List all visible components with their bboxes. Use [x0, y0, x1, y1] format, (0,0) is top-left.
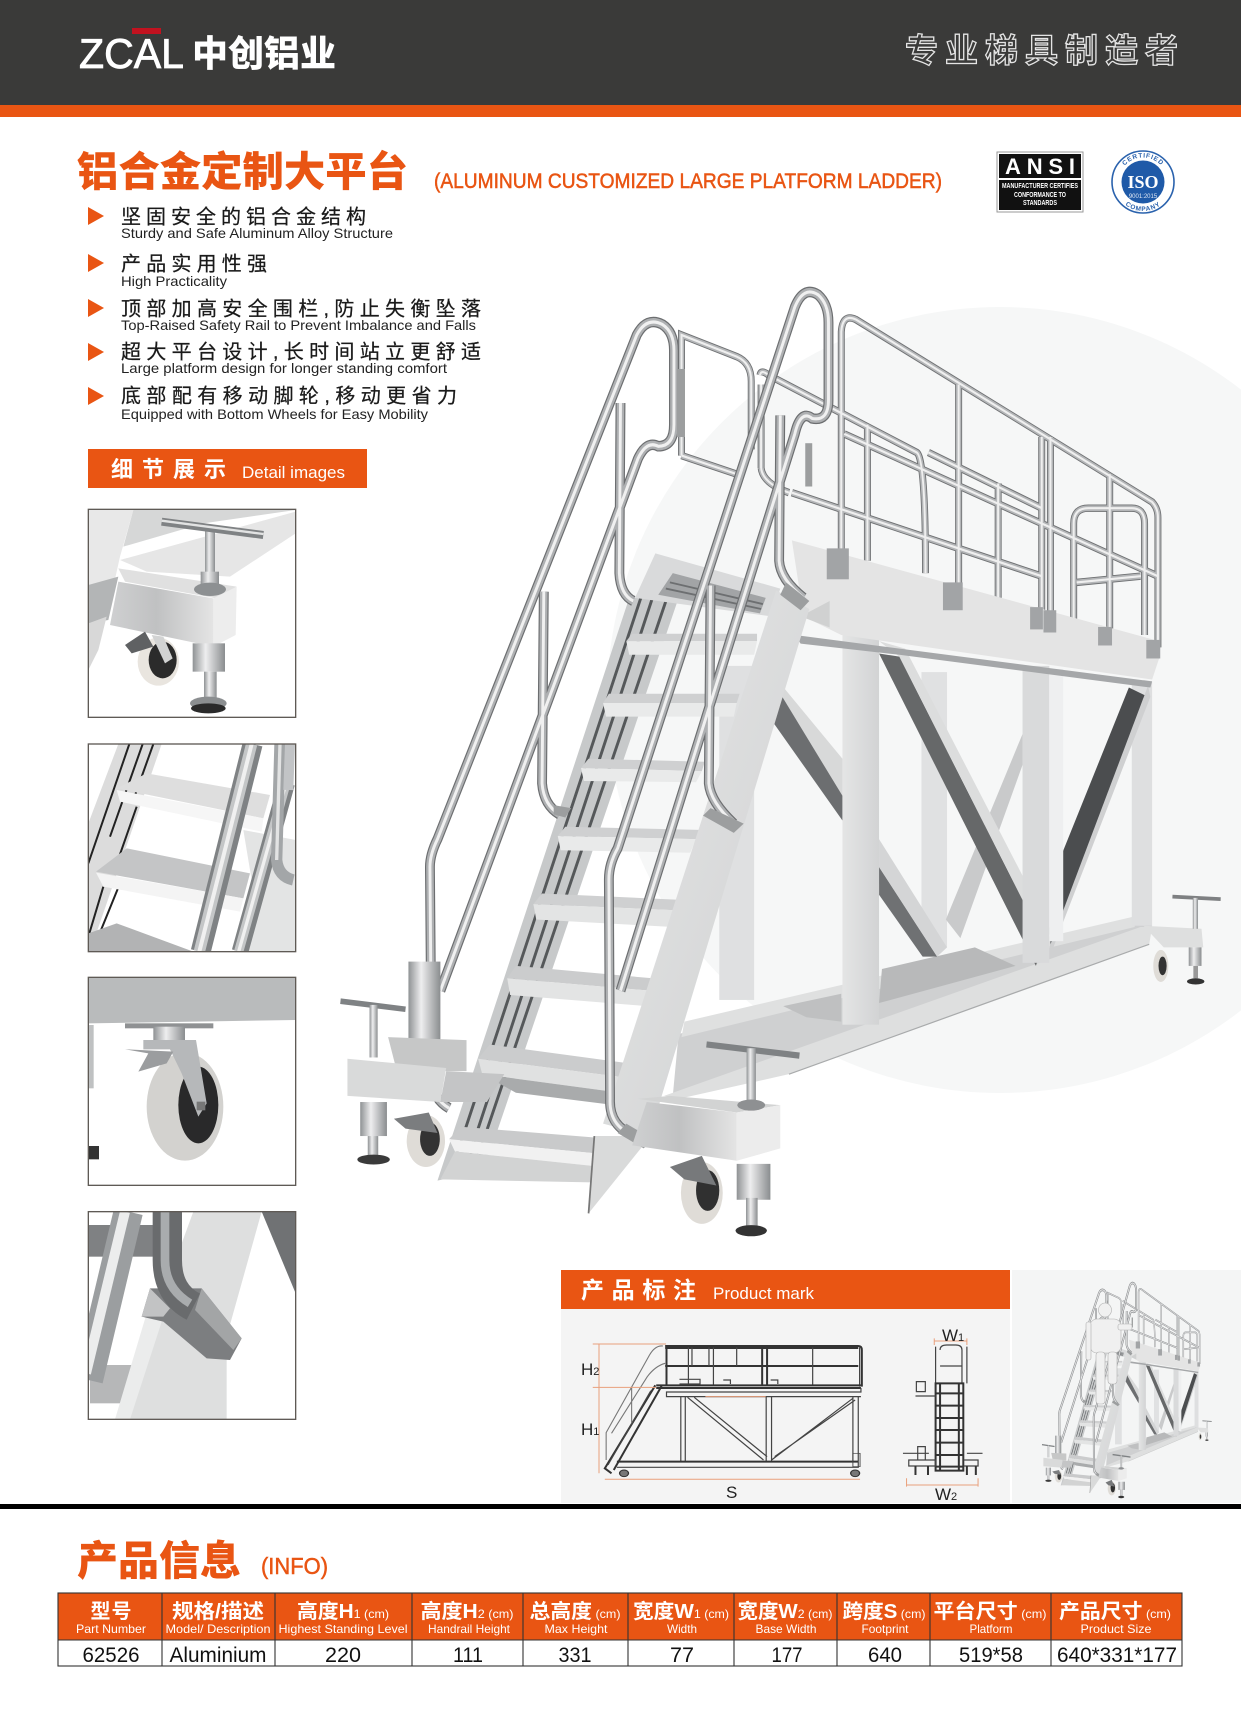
feature: sturdy	[88, 206, 393, 241]
column: W1: 宽度W1 (cm)	[633, 1599, 729, 1623]
table grid	[58, 1593, 1182, 1666]
column: model: 规格/描述	[172, 1600, 264, 1623]
column: H1	[278, 1599, 408, 1667]
badge: ISO: COMPANY	[1126, 202, 1159, 211]
label: H2: H2	[581, 1360, 599, 1379]
backdrop circle	[607, 307, 1241, 1093]
feature: practicality: High Practicality	[121, 273, 227, 289]
logo: ZCAL 中创铝业: ZCAL	[79, 30, 184, 77]
heading: detail images	[88, 449, 367, 488]
detail image 3: caster wheel	[88, 977, 296, 1185]
logo: ZCAL 中创铝业: 中创铝业	[192, 33, 336, 74]
label: H1: H1	[581, 1420, 599, 1439]
panel: product mark	[561, 1270, 1010, 1504]
main product: platform ladder	[340, 292, 1221, 1236]
badge: ISO: 9001:2015	[1129, 194, 1158, 200]
feature: large platform	[88, 340, 481, 376]
column: product size: Product Size	[1080, 1622, 1152, 1636]
column: W2: 177	[772, 1644, 802, 1667]
logo: ZCAL 中创铝业	[79, 28, 336, 77]
badge: ANSI: CONFORMANCE TO	[1014, 192, 1066, 199]
slogan: 专业梯具制造者	[905, 32, 1178, 69]
heading: product info	[77, 1538, 328, 1584]
column: model: Aluminium	[170, 1644, 266, 1667]
feature: wheels: Equipped with Bottom Wheels for Easy Mobility	[121, 406, 428, 422]
feature: large platform: Large platform design for longer standing comfort	[121, 360, 447, 376]
badge: ISO: ISO	[1127, 172, 1159, 192]
heading: product mark: Product mark	[713, 1284, 814, 1303]
rail clamps	[827, 548, 1160, 658]
right base block with T-handle, leveler and caster	[1143, 897, 1221, 984]
column: part number: Part Number	[76, 1622, 146, 1636]
feature: safety rail: 顶部加高安全围栏,防止失衡坠落	[121, 298, 481, 320]
feature: large platform: 超大平台设计,长时间站立更舒适	[121, 340, 481, 364]
column: H2	[420, 1599, 514, 1667]
column: H1: 高度H1 (cm)	[297, 1599, 389, 1623]
column: H1: 220	[325, 1644, 361, 1667]
column: footprint: Footprint	[862, 1622, 909, 1636]
mannequin	[1086, 1303, 1132, 1404]
label: S: S	[726, 1483, 737, 1502]
badge: ANSI: STANDARDS	[1023, 200, 1057, 207]
panel background	[561, 1309, 1010, 1503]
rear platform rails	[682, 318, 1158, 647]
label: W2: W2	[935, 1485, 957, 1504]
feature: sturdy: 坚固安全的铝合金结构	[121, 206, 366, 228]
feature list	[88, 206, 481, 422]
column: H2: Handrail Height	[428, 1622, 511, 1636]
stair stringer ribs	[437, 598, 679, 1181]
column: platform	[934, 1599, 1046, 1667]
badge: ANSI: MANUFACTURER CERTIFIES	[1002, 183, 1078, 190]
column: model: Model/ Description	[166, 1622, 270, 1636]
header band	[0, 0, 1241, 117]
badge: ANSI	[997, 152, 1083, 212]
stair handrails	[430, 292, 828, 1136]
feature: wheels	[88, 384, 457, 422]
column: max height: Max Height	[544, 1622, 608, 1636]
detail image 4: handrail joint	[86, 1212, 296, 1419]
column: W1: 77	[670, 1644, 694, 1667]
side elevation drawing	[605, 1346, 862, 1477]
feature: sturdy: Sturdy and Safe Aluminum Alloy Structure	[121, 225, 393, 241]
feature: safety rail	[88, 298, 481, 333]
column: H2: 111	[453, 1644, 483, 1667]
badge: ANSI: ANSI	[1005, 154, 1075, 179]
bottom divider	[0, 1504, 1241, 1509]
column: platform: 平台尺寸 (cm)	[934, 1599, 1046, 1623]
detail image 1: leveler and caster	[88, 509, 296, 717]
heading: detail images: Detail images	[242, 463, 345, 482]
column: part number	[76, 1600, 146, 1667]
column: footprint	[842, 1600, 926, 1667]
column: W2: Base Width	[756, 1622, 816, 1636]
column: W2: 宽度W2 (cm)	[738, 1599, 832, 1623]
column: max height: 总高度 (cm)	[530, 1599, 620, 1623]
column: H2: 高度H2 (cm)	[420, 1599, 514, 1623]
column: product size	[1057, 1600, 1177, 1667]
label: W1: W1	[942, 1326, 964, 1345]
column: product size: 产品尺寸 (cm)	[1059, 1600, 1171, 1623]
subtitle: (ALUMINUM CUSTOMIZED LARGE PLATFORM LADDER)	[434, 170, 942, 193]
column: footprint: 跨度S (cm)	[842, 1600, 926, 1623]
column: H1: Highest Standing Level	[278, 1622, 408, 1636]
heading: product info: (INFO)	[261, 1553, 328, 1579]
handrail joints	[554, 369, 812, 1148]
column: part number: 型号	[90, 1600, 132, 1623]
feature: wheels: 底部配有移动脚轮,移动更省力	[121, 384, 457, 408]
feature: practicality: 产品实用性强	[121, 252, 267, 276]
column: model	[166, 1600, 270, 1667]
badge: ISO	[1111, 150, 1175, 214]
miniature ladder	[1042, 1283, 1212, 1498]
base floor frame	[664, 916, 1152, 1099]
column: max height: 331	[558, 1644, 592, 1667]
title: 铝合金定制大平台	[77, 149, 408, 195]
badge: ISO: CERTIFIED	[1122, 153, 1163, 165]
column: part number: 62526	[82, 1644, 140, 1667]
spec table	[58, 1593, 1182, 1667]
heading: product mark	[561, 1270, 1010, 1309]
panel: usage illustration	[1012, 1270, 1241, 1503]
front elevation drawing	[903, 1345, 983, 1475]
column: W1	[633, 1599, 729, 1667]
column: max height	[530, 1599, 620, 1667]
feature: safety rail: Top-Raised Safety Rail to Prevent Imbalance and Falls	[121, 317, 476, 333]
column: W1: Width	[667, 1622, 697, 1636]
top landing	[635, 553, 780, 616]
column: W2	[738, 1599, 832, 1667]
heading: detail images: 细节展示	[111, 457, 226, 482]
column: platform: 519*58	[959, 1644, 1023, 1667]
feature: practicality	[88, 252, 267, 289]
column: platform: Platform	[970, 1622, 1012, 1636]
platform deck	[792, 540, 1159, 688]
stair treads	[440, 634, 757, 1182]
dimension lines	[593, 1338, 978, 1487]
column: footprint: 640	[868, 1644, 902, 1667]
heading: product info: 产品信息	[77, 1538, 241, 1584]
left base block with T-handle, pipe, leveler and caster	[340, 962, 504, 1167]
detail image 2: stair treads	[88, 744, 296, 952]
heading: product mark: 产品标注	[581, 1277, 696, 1303]
right stringer	[589, 590, 809, 1213]
front base block with T-handle, leveler and caster	[632, 1044, 799, 1236]
truss columns and diagonals	[719, 635, 1152, 1025]
column: product size: 640*331*177	[1057, 1644, 1177, 1667]
table header background	[58, 1593, 1182, 1640]
